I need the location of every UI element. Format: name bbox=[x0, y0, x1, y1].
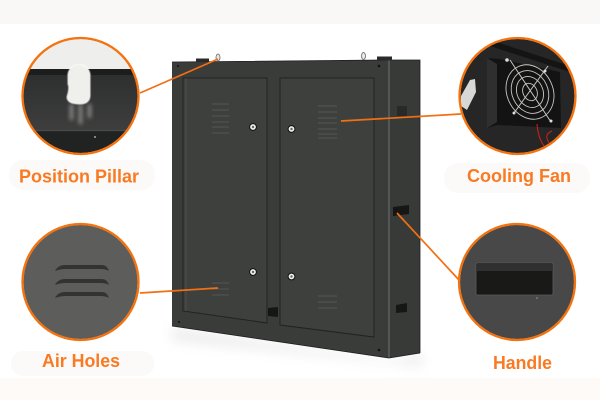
right door bbox=[280, 78, 374, 337]
label: Cooling Fan: Cooling Fan bbox=[467, 166, 571, 186]
left door lower vents bbox=[212, 283, 229, 295]
left door bbox=[183, 78, 267, 323]
label: Air Holes: Air Holes bbox=[42, 351, 120, 371]
line: cooling fan bbox=[341, 114, 461, 121]
left door upper vents bbox=[212, 104, 229, 133]
cabinet floor shadow bbox=[172, 328, 422, 366]
cabinet cut-outs bbox=[268, 106, 409, 317]
right door upper vents bbox=[318, 106, 337, 138]
circle: position pillar detail bbox=[20, 36, 142, 156]
top tabs and pins bbox=[196, 52, 392, 62]
cabinet front face bbox=[172, 60, 389, 358]
label backdrops bbox=[9, 160, 590, 376]
handle slot bbox=[476, 263, 553, 295]
white plug bbox=[461, 79, 476, 110]
left door locks bbox=[250, 124, 256, 275]
fan screws bbox=[505, 58, 552, 123]
circle: cooling fan detail bbox=[460, 36, 576, 156]
callout lines bbox=[140, 59, 461, 293]
corner screws bbox=[177, 65, 380, 351]
line: air holes bbox=[140, 288, 218, 293]
pillar reflections bbox=[70, 104, 91, 124]
circle: handle detail bbox=[459, 224, 575, 340]
right door lower vents bbox=[318, 296, 337, 308]
label: Position Pillar: Position Pillar bbox=[19, 166, 139, 186]
right door locks bbox=[288, 126, 295, 280]
label: Handle: Handle bbox=[493, 353, 552, 373]
fan grill bbox=[506, 64, 554, 120]
cabinet side face bbox=[389, 60, 420, 358]
line: position pillar bbox=[140, 59, 218, 93]
fan housing bbox=[487, 58, 561, 128]
vent slots bbox=[55, 265, 109, 298]
line: handle bbox=[397, 213, 459, 280]
LED cabinet bbox=[172, 52, 420, 358]
circle: air holes detail bbox=[22, 224, 138, 340]
white pillar bbox=[67, 64, 90, 104]
red wires bbox=[537, 124, 552, 146]
